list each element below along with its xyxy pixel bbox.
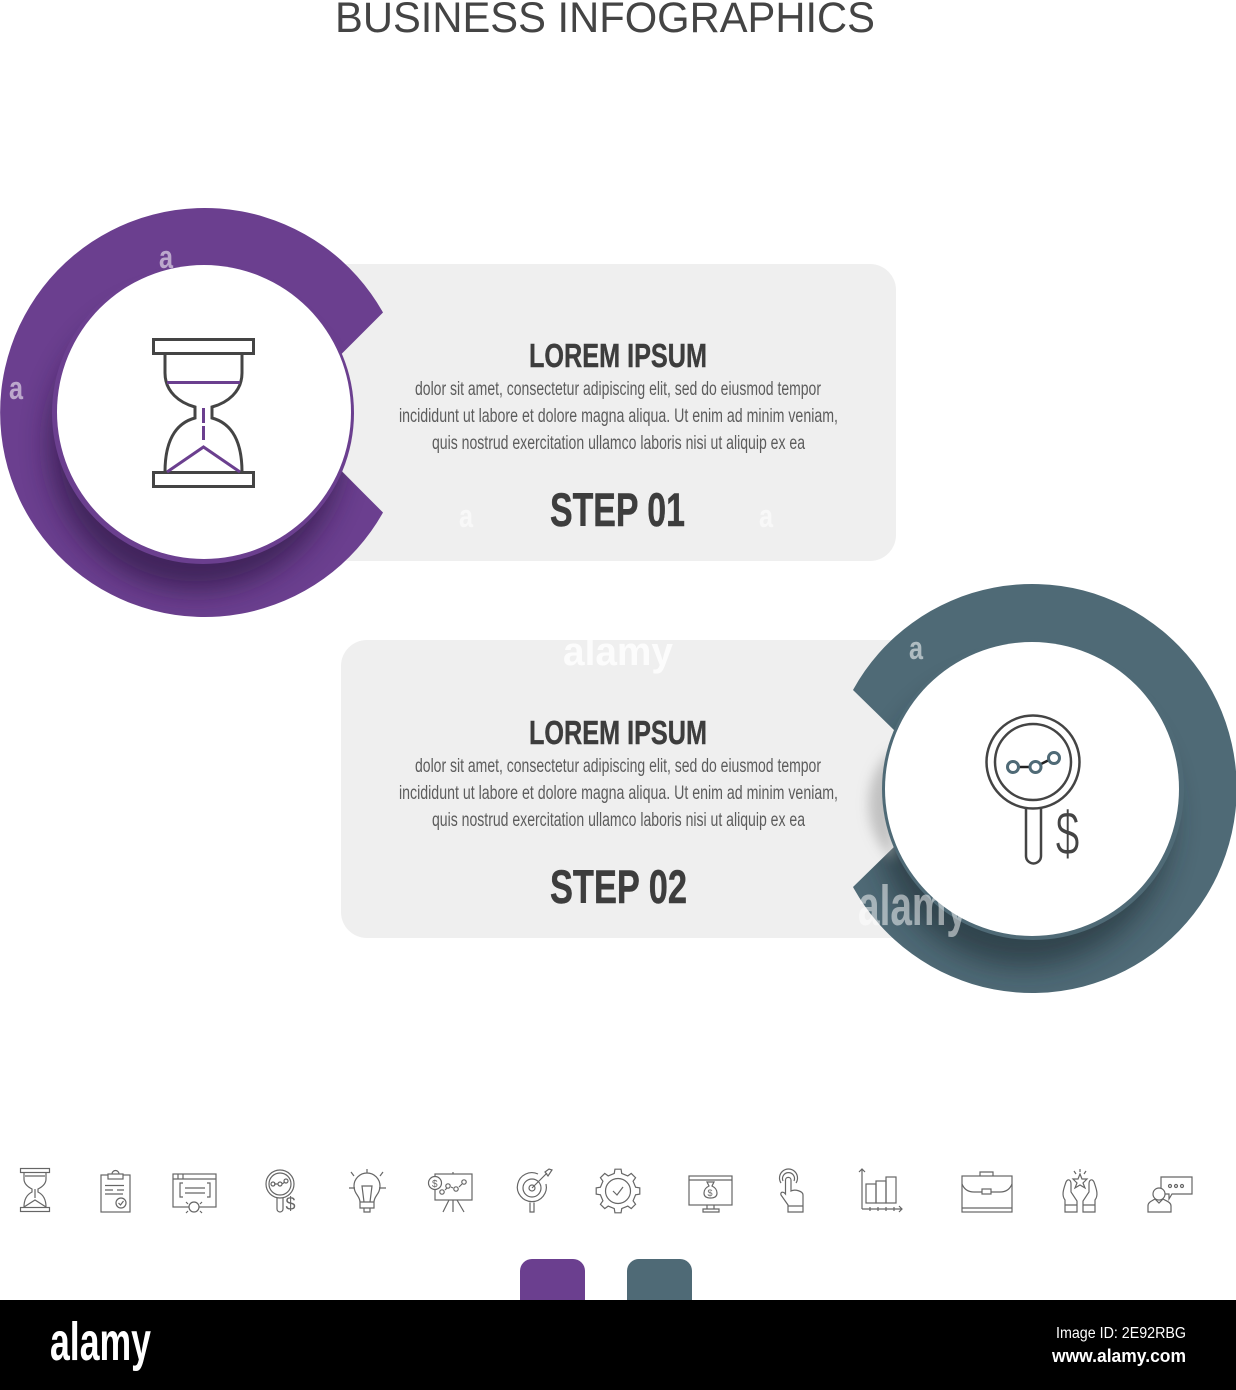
body text 2: incididunt ut labore et dolore magna aliqua. Ut enim ad minim veniam, — [399, 783, 838, 804]
watermarks: a — [159, 239, 173, 275]
card shadow — [869, 750, 893, 860]
icon: target — [517, 1169, 552, 1212]
icon: monitor with money bag: $ — [708, 1188, 713, 1198]
white circle — [57, 265, 351, 559]
icon: hourglass — [154, 340, 254, 486]
ring shadow — [49, 297, 343, 591]
body text 1: dolor sit amet, consectetur adipiscing elit, sed do eiusmod tempor — [415, 379, 821, 400]
step label 02: STEP 02 — [550, 860, 687, 913]
card: step 01 background — [300, 264, 896, 561]
icon: bar chart — [859, 1169, 902, 1212]
body text 2: dolor sit amet, consectetur adipiscing elit, sed do eiusmod tempor — [415, 756, 821, 777]
watermarks: a — [909, 630, 923, 666]
colour swatch: teal — [627, 1259, 692, 1300]
icon: hourglass small — [20, 1168, 50, 1212]
website: www.alamy.com — [1051, 1346, 1186, 1366]
icon: light bulb — [349, 1169, 386, 1212]
icon: magnifier with dollar: $ — [1056, 800, 1080, 869]
icon: magnifier with dollar — [986, 716, 1080, 869]
heading: lorem ipsum 1: LOREM IPSUM — [529, 337, 707, 374]
icon: presentation board: $ — [432, 1179, 438, 1190]
footer bar — [0, 1300, 1236, 1390]
heading: lorem ipsum 2: LOREM IPSUM — [529, 714, 707, 751]
circle rim — [52, 262, 354, 564]
watermarks: alamy — [563, 630, 674, 674]
card: step 02 background — [341, 640, 937, 938]
white circle — [885, 642, 1179, 936]
step label 01: STEP 01 — [550, 483, 685, 536]
teal ring — [853, 584, 1236, 993]
body text 2: quis nostrud exercitation ullamco laboris nisi ut aliquip ex ea — [432, 810, 805, 831]
panel: step 01 — [0, 208, 896, 617]
body text 1 — [399, 379, 838, 454]
icon row — [20, 1168, 1192, 1214]
watermarks: a — [459, 498, 473, 534]
icon: person with speech bubble — [1148, 1177, 1192, 1212]
panel: step 02 — [341, 584, 1236, 993]
watermarks: a — [759, 498, 773, 534]
icon: magnifier small: $ — [286, 1194, 296, 1214]
icon: certificate window — [173, 1174, 216, 1213]
icon: gear — [596, 1169, 640, 1213]
body text 1: incididunt ut labore et dolore magna aliqua. Ut enim ad minim veniam, — [399, 406, 838, 427]
watermarks: alamy — [858, 874, 968, 938]
footer logo: alamy — [50, 1312, 151, 1372]
purple ring — [0, 208, 383, 617]
icon: monitor with money bag — [689, 1176, 732, 1212]
image id: Image ID: 2E92RBG — [1056, 1325, 1186, 1342]
icon: briefcase — [962, 1172, 1012, 1212]
body text 2 — [399, 756, 838, 831]
icon: hands with star — [1063, 1169, 1097, 1212]
ring shadow — [877, 673, 1171, 967]
icon: magnifier small — [266, 1170, 296, 1214]
icon: clipboard — [101, 1170, 130, 1212]
body text 1: quis nostrud exercitation ullamco laboris nisi ut aliquip ex ea — [432, 433, 805, 454]
circle rim — [882, 638, 1184, 940]
icon: presentation board — [428, 1172, 472, 1212]
icon: pointing hand — [780, 1169, 803, 1212]
watermarks — [9, 239, 968, 938]
colour swatch: purple — [520, 1259, 585, 1300]
watermarks: a — [9, 370, 23, 406]
